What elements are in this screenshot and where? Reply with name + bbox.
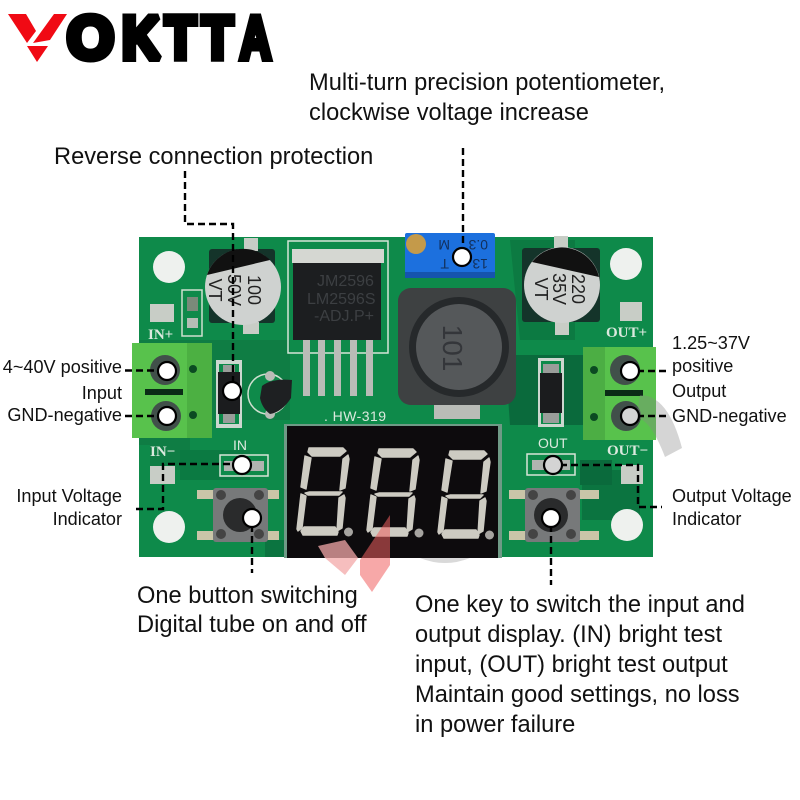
input side labels: 4~40V positive xyxy=(3,357,122,377)
potentiometer xyxy=(405,233,495,278)
input capacitor: 50V xyxy=(224,274,244,306)
protection diode xyxy=(216,360,242,428)
output capacitor: 35V xyxy=(549,273,569,305)
logo: VOKTTA: T xyxy=(202,4,233,72)
right push button xyxy=(509,488,599,542)
transistor xyxy=(248,371,292,419)
input side labels: GND-negative xyxy=(7,405,122,425)
text: one key display switching: output display. (IN) bright test xyxy=(415,622,722,648)
output terminal block xyxy=(583,347,656,440)
panel: circuit board photo xyxy=(132,233,656,558)
seven-segment display xyxy=(284,424,502,558)
potentiometer: 0.3 xyxy=(468,237,488,253)
silkscreen labels: OUT− xyxy=(607,443,648,459)
left push button xyxy=(197,488,279,542)
logo: VOKTTA: T xyxy=(165,4,196,72)
text: one button switching xyxy=(137,583,367,638)
silkscreen labels: IN− xyxy=(150,444,175,460)
input voltage indicator label: Indicator xyxy=(53,509,122,529)
potentiometer: T xyxy=(440,256,449,272)
input side labels: Input xyxy=(82,383,122,403)
logo: VOKTTA: K xyxy=(122,4,160,72)
logo: VOKTTA xyxy=(8,4,271,72)
regulator IC LM2596S: -ADJ.P+ xyxy=(314,308,374,325)
output voltage indicator label xyxy=(672,486,792,529)
input capacitor: 100 xyxy=(244,275,264,305)
output capacitor xyxy=(522,236,600,335)
output indicator LED xyxy=(527,454,575,475)
input terminal block xyxy=(132,343,212,438)
input voltage indicator label xyxy=(16,486,122,529)
output side labels: 1.25~37V xyxy=(672,333,750,353)
input capacitor xyxy=(205,238,281,334)
output capacitor: VT xyxy=(531,277,551,301)
silkscreen labels: OUT xyxy=(538,435,568,451)
output side labels: GND-negative xyxy=(672,406,787,426)
inductor: 101 xyxy=(437,325,468,371)
input indicator LED xyxy=(220,455,268,476)
silkscreen labels: IN xyxy=(233,437,247,453)
output side labels xyxy=(672,333,787,426)
output side labels: positive xyxy=(672,356,733,376)
heading: potentiometer note: clockwise voltage increase xyxy=(309,100,589,126)
regulator IC LM2596S: JM2596 xyxy=(317,273,374,290)
logo: VOKTTA: O xyxy=(67,4,114,72)
input capacitor: VT xyxy=(205,278,225,302)
text: one key display switching: Maintain good settings, no loss xyxy=(415,682,740,708)
heading: potentiometer note xyxy=(309,70,665,126)
mounting holes xyxy=(153,251,185,283)
silkscreen labels xyxy=(148,325,648,460)
text: one key display switching: input, (OUT) bright test output xyxy=(415,652,728,678)
heading: potentiometer note: Multi-turn precision potentiometer, xyxy=(309,70,665,96)
output voltage indicator label: Indicator xyxy=(672,509,741,529)
silkscreen labels: IN+ xyxy=(148,327,173,343)
output side labels: Output xyxy=(672,381,726,401)
text: one button switching: One button switching xyxy=(137,583,358,609)
text: one key display switching xyxy=(415,592,745,738)
callout markers xyxy=(158,248,639,527)
heading: reverse connection protection: Reverse connection protection xyxy=(54,144,373,170)
text: one key display switching: One key to switch the input and xyxy=(415,592,745,618)
small SMD LED xyxy=(182,290,202,336)
text: one button switching: Digital tube on and off xyxy=(137,612,367,638)
potentiometer: M xyxy=(438,237,450,253)
inductor xyxy=(398,288,516,419)
silkscreen labels: . HW-319 xyxy=(324,408,386,424)
silkscreen labels: OUT+ xyxy=(606,325,647,341)
watermark xyxy=(318,395,682,592)
regulator IC LM2596S: LM2596S xyxy=(307,291,376,308)
text: one key display switching: in power failure xyxy=(415,712,575,738)
logo: VOKTTA: A xyxy=(240,4,271,72)
input voltage indicator label: Input Voltage xyxy=(16,486,122,506)
output diode xyxy=(538,358,564,427)
output capacitor: 220 xyxy=(568,274,588,304)
potentiometer: 13 xyxy=(472,256,488,272)
input side labels xyxy=(3,357,122,425)
output voltage indicator label: Output Voltage xyxy=(672,486,792,506)
board substrate xyxy=(139,237,653,557)
solder pads xyxy=(150,304,174,322)
regulator IC LM2596S xyxy=(288,241,388,396)
leader lines xyxy=(125,148,668,585)
